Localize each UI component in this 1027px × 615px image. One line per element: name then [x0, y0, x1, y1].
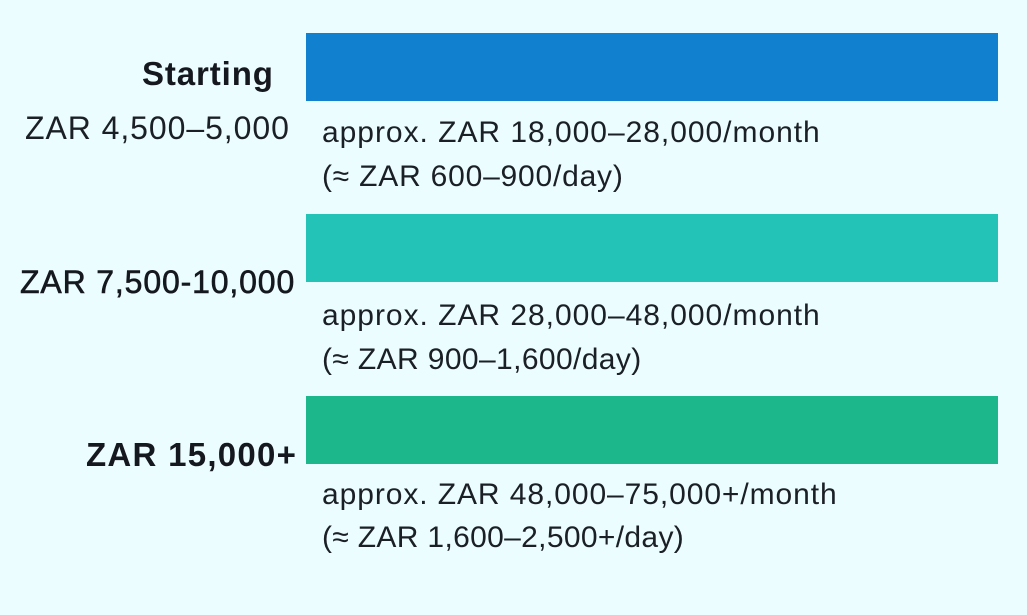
tier 3 price: ZAR 15,000+ [86, 436, 297, 473]
tier 1 monthly text: approx. ZAR 18,000–28,000/month [322, 116, 821, 149]
tier 3 daily text: (≈ ZAR 1,600–2,500+/day) [322, 521, 684, 554]
tier 1 bar [306, 33, 998, 101]
tier 2 daily text: (≈ ZAR 900–1,600/day) [322, 343, 642, 376]
tier 1 price: ZAR 4,500–5,000 [25, 110, 290, 146]
tier 3 monthly text: approx. ZAR 48,000–75,000+/month [322, 478, 838, 511]
tier 3 bar [306, 396, 998, 464]
tier 2 price: ZAR 7,500-10,000 [20, 264, 295, 300]
tier 2 bar [306, 214, 998, 282]
tier 1 heading: Starting [142, 55, 274, 92]
tier 2 monthly text: approx. ZAR 28,000–48,000/month [322, 299, 821, 332]
tier 1 daily text: (≈ ZAR 600–900/day) [322, 160, 624, 193]
